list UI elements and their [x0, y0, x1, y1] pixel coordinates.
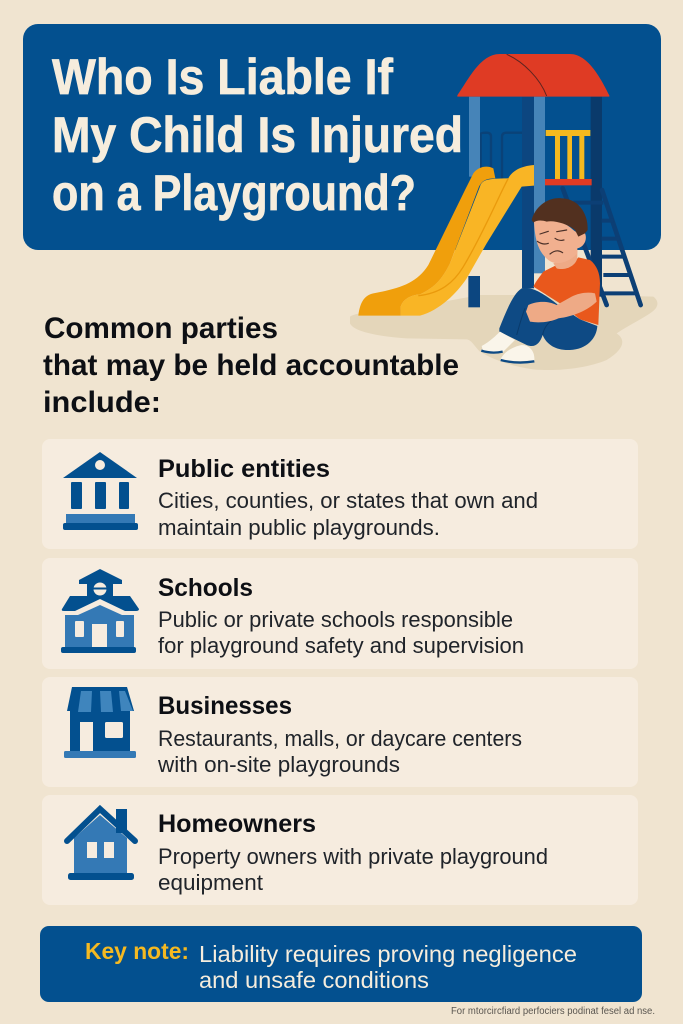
text: homeowners: equipment [158, 870, 263, 895]
panel: public entities [42, 439, 638, 549]
text: schools [158, 574, 524, 658]
text: homeowners [158, 810, 548, 895]
text: businesses: with on-site playgrounds [157, 752, 400, 777]
text: public entities: Cities, counties, or states that own and [158, 488, 538, 513]
panel: schools [42, 558, 638, 669]
text: schools: for playground safety and supervision [158, 633, 524, 658]
text: public entities: maintain public playgrounds. [158, 515, 440, 540]
icon: storefront [64, 687, 136, 758]
header panel [23, 24, 661, 250]
subheading [43, 312, 459, 419]
panel: homeowners [42, 795, 638, 905]
subheading: include: [43, 386, 161, 419]
title: on a Playground? [52, 165, 416, 221]
icon: school building [61, 569, 139, 653]
panel: businesses [42, 677, 638, 787]
icon: government building [63, 452, 138, 530]
play structure [457, 54, 641, 307]
callout: key note [40, 926, 642, 1002]
icon: house [67, 809, 135, 880]
child [481, 198, 600, 363]
footnote: For mtorcircfiard perfociers podinat fesel ad nse. [451, 1006, 655, 1017]
text: homeowners: Homeowners [158, 810, 316, 838]
text: schools: Schools [158, 574, 253, 602]
illustration: sad child beside playground slide [350, 54, 657, 370]
text: schools: Public or private schools responsible [158, 607, 513, 632]
text: businesses [157, 692, 522, 777]
title: My Child Is Injured [52, 107, 463, 163]
text: homeowners: Property owners with private playground [158, 844, 548, 869]
callout: key note: Liability requires proving negligence [199, 941, 577, 967]
text: public entities: Public entities [158, 455, 330, 483]
subheading: that may be held accountable [43, 349, 459, 382]
callout: key note: and unsafe conditions [199, 967, 429, 993]
text: businesses: Restaurants, malls, or daycare centers [158, 726, 522, 751]
title [52, 49, 463, 221]
slide [358, 165, 534, 316]
text: businesses: Businesses [158, 692, 292, 720]
callout: key note: Key note: [85, 938, 189, 964]
subheading: Common parties [44, 312, 278, 345]
ground shadow [350, 295, 657, 370]
title: Who Is Liable If [52, 49, 393, 105]
text: public entities [158, 455, 538, 540]
